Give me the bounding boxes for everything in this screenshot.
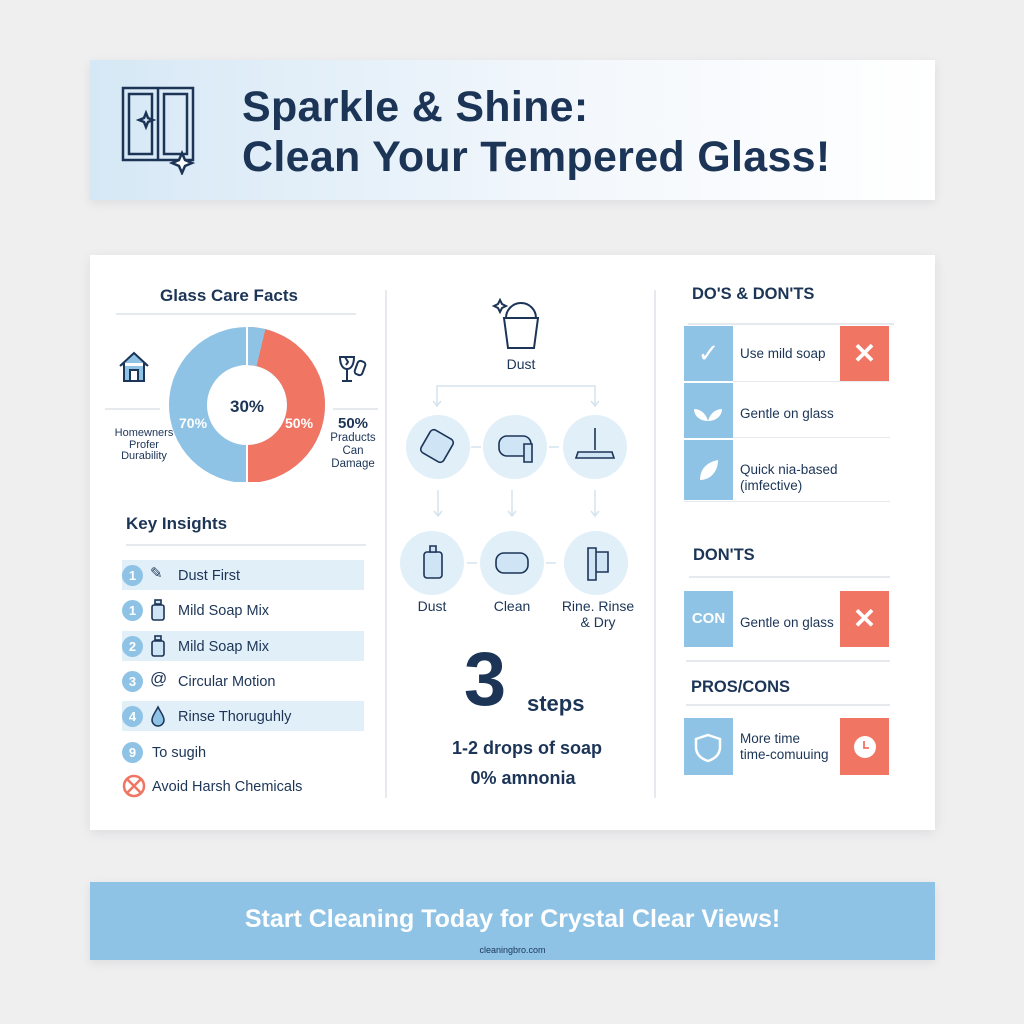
heading: pros/cons: PROS/CONS	[691, 678, 790, 696]
title text: Clean Your Tempered Glass!	[242, 133, 830, 181]
panel: dos and donts	[684, 285, 894, 775]
panel: dos and donts: time-comuuing	[740, 747, 829, 762]
step labels: Dust	[418, 598, 446, 614]
icon: bucket	[494, 300, 538, 348]
panel: dos and donts: Use mild soap	[740, 346, 826, 361]
donut chart	[169, 327, 325, 482]
insight 1: Dust First	[178, 568, 240, 584]
panel: dos and donts: ✕	[853, 338, 876, 369]
insight 5: 4	[129, 709, 136, 724]
main card	[90, 255, 935, 830]
insight 6: 9	[129, 745, 136, 760]
panel: dos and donts: (imfective)	[740, 478, 802, 493]
insight 4: 3	[129, 674, 136, 689]
title banner	[90, 60, 935, 200]
pros/cons row	[684, 718, 733, 775]
dont row	[684, 591, 733, 647]
dont row: CON	[692, 610, 725, 627]
source: cleaningbro.com	[479, 945, 546, 955]
footer text: Start Cleaning Today for Crystal Clear Views!	[245, 905, 780, 933]
donut chart: 50%	[285, 415, 314, 431]
panel: cleaning steps: 1-2 drops of soap	[452, 738, 602, 758]
insight 5	[122, 701, 364, 731]
insight 6: To sugih	[152, 745, 206, 761]
icon: broken glass	[339, 356, 366, 382]
panel: cleaning steps	[400, 298, 634, 788]
panel: glass care facts	[105, 286, 378, 482]
insight 1: ✎	[150, 565, 163, 582]
step labels: Rine. Rinse	[562, 598, 634, 614]
insight 3	[122, 631, 364, 661]
do row 1: ✓	[698, 338, 719, 368]
insight 2: 1	[129, 603, 136, 618]
panel: dos and donts: Gentle on glass	[740, 406, 834, 421]
panel: dos and donts: More time	[740, 731, 800, 746]
donut chart: 70%	[179, 415, 208, 431]
heading: glass care facts: Glass Care Facts	[160, 286, 298, 305]
do row 2	[684, 383, 733, 438]
insight 5: Rinse Thoruguhly	[178, 709, 291, 725]
do row 1	[684, 326, 733, 381]
big number: 3	[464, 637, 506, 722]
insight 7	[122, 774, 302, 798]
label: products can damage: Damage	[331, 458, 375, 470]
label: products can damage: Praducts	[330, 432, 376, 444]
insight 3: 2	[129, 639, 136, 654]
title text: Sparkle & Shine:	[242, 83, 589, 131]
step labels: & Dry	[580, 614, 616, 630]
donut chart: 30%	[230, 397, 264, 416]
heading: key insights: Key Insights	[126, 514, 227, 533]
insight 7: Avoid Harsh Chemicals	[152, 779, 302, 795]
label: products can damage: 50%	[338, 415, 368, 432]
insight 4: Circular Motion	[178, 674, 276, 690]
do row 3	[684, 440, 733, 500]
insight 1	[122, 560, 364, 590]
label: products can damage	[330, 415, 376, 470]
label: products can damage: Can	[342, 445, 364, 457]
step circles	[400, 415, 628, 595]
icon: house	[119, 352, 149, 382]
heading: do's & don'ts: DO'S & DON'TS	[692, 285, 814, 303]
panel: dos and donts: ✕	[853, 603, 876, 634]
heading: don'ts: DON'TS	[693, 546, 755, 564]
panel: dos and donts: Gentle on glass	[740, 615, 834, 630]
panel: cleaning steps: 0% amnonia	[470, 768, 577, 788]
footer banner	[90, 882, 935, 960]
insight 1: 1	[129, 568, 136, 583]
insight 4	[122, 669, 276, 692]
insight 6	[122, 742, 206, 763]
title text	[242, 83, 830, 181]
panel: cleaning steps: Dust	[507, 356, 535, 372]
label: homeowners: Homewners Profer Durability	[115, 427, 173, 462]
insight 2	[122, 599, 269, 621]
insight 4: @	[150, 669, 167, 688]
insight 2: Mild Soap Mix	[178, 603, 269, 619]
step labels: Clean	[494, 598, 530, 614]
step labels	[418, 598, 634, 630]
panel: cleaning steps: steps	[527, 691, 584, 716]
icon: window	[122, 86, 195, 175]
panel: dos and donts: Quick nia-based	[740, 462, 838, 477]
insight 3: Mild Soap Mix	[178, 639, 269, 655]
